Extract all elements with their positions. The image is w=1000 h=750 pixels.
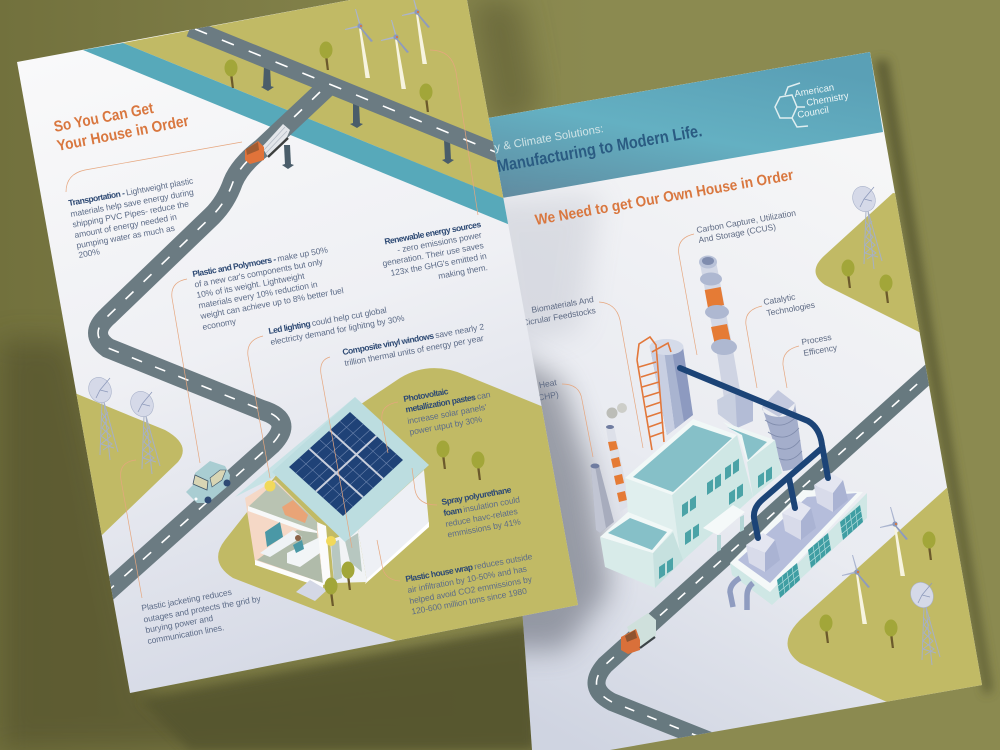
text: transportation: pumping water as much as bbox=[76, 223, 175, 250]
callout: process efficiency: Efficency bbox=[803, 342, 839, 358]
callout: biomaterials: Biomaterials And bbox=[531, 294, 595, 315]
icon: silo bbox=[762, 390, 803, 471]
callout: CCUS bbox=[696, 211, 796, 243]
text: renewable energy sources: 123x the GHG's emitted in bbox=[390, 251, 488, 278]
front bush bbox=[324, 578, 338, 606]
callout: combined heat and power: Combined Heat bbox=[498, 377, 558, 397]
text: plastic house wrap: 120-600 million tons since 1980 bbox=[411, 586, 528, 616]
olive area top right bbox=[816, 193, 920, 332]
callout: CCUS: And Storage (CCUS) bbox=[698, 221, 777, 245]
solar panels bbox=[289, 412, 403, 516]
text: plastic and polymers: weight can achieve up to 8% better fuel bbox=[199, 285, 344, 321]
pillar and porch bbox=[317, 522, 331, 585]
logo: American Chemistry Council: American bbox=[794, 82, 835, 100]
text: plastic and polymers: Plastic and Polymoers - make up 50% bbox=[192, 244, 329, 279]
logo: American Chemistry Council: Chemistry bbox=[806, 91, 850, 109]
icon: small chimneys with smoke bbox=[590, 403, 630, 533]
text: transportation bbox=[68, 175, 195, 260]
wind turbines left page bbox=[345, 0, 430, 89]
icon: blue car bbox=[186, 461, 230, 504]
olive field top bbox=[123, 0, 510, 201]
text: plastic house wrap: helped avoid CO2 emmissions by bbox=[409, 574, 533, 606]
text: renewable energy sources: making them. bbox=[437, 262, 488, 281]
icon: lower factory with rooftop units bbox=[730, 473, 867, 610]
roof plane bbox=[272, 397, 429, 542]
panel: left page, so you can get your house in order bbox=[0, 0, 600, 700]
panel: right page, own house in order bbox=[488, 52, 982, 750]
text: photovoltaic metallization pastes: increase solar panels' bbox=[407, 402, 488, 426]
text: renewable energy sources: Renewable energy sources bbox=[384, 219, 482, 246]
olive field left bbox=[76, 394, 183, 535]
text: plastic house wrap bbox=[405, 551, 533, 616]
text: plastic house wrap: Plastic house wrap reduces outside bbox=[405, 551, 533, 584]
delivery truck bbox=[621, 613, 656, 654]
gable overhang bbox=[235, 397, 355, 497]
text: spray polyurethane foam: Spray polyurethane bbox=[441, 484, 512, 507]
lower box bbox=[600, 537, 655, 588]
text: plastic and polymers: of a new car's components but only bbox=[194, 256, 324, 289]
callout: catalytic technologies bbox=[764, 294, 815, 316]
logo: American Chemistry Council: Council bbox=[797, 105, 830, 121]
text: plastic and polymers: 10% of its weight. Lightweight bbox=[196, 270, 306, 300]
callout: process efficiency bbox=[802, 336, 837, 356]
text: spray polyurethane foam: foam insulation could bbox=[443, 494, 521, 518]
text: renewable energy sources: generation. Their use saves bbox=[382, 240, 484, 268]
callout: CCUS: Carbon Capture, Utilization bbox=[696, 208, 797, 235]
text: spray polyurethane foam: emmissions by 41% bbox=[447, 516, 522, 539]
wind turbines right page bbox=[842, 507, 908, 624]
header band bbox=[449, 52, 883, 198]
text: composite vinyl windows: Composite vinyl windows save nearly 2 bbox=[342, 321, 485, 357]
pipe truck bbox=[245, 124, 290, 164]
text: plastic jacketing bbox=[141, 587, 262, 646]
callout lines left page bbox=[66, 50, 478, 598]
navy process pipes bbox=[680, 368, 828, 538]
icon: big chimney bbox=[699, 256, 753, 428]
text: plastic jacketing: Plastic jacketing reduces bbox=[141, 587, 232, 613]
road bbox=[596, 368, 935, 745]
canopy bbox=[703, 505, 745, 535]
text: plastic jacketing: outages and protects the grid by bbox=[143, 593, 262, 624]
callout: biomaterials bbox=[526, 296, 596, 326]
heading: so you can get your house in order: Your House in Order bbox=[56, 113, 190, 155]
windows bbox=[659, 458, 772, 579]
icon: main factory building bbox=[600, 419, 782, 588]
header title: Manufacturing to Modern Life. bbox=[495, 121, 704, 176]
rooftop cubes bbox=[746, 533, 780, 572]
text: plastic jacketing: communication lines. bbox=[147, 622, 225, 646]
text: spray polyurethane foam: reduce havc-relates bbox=[445, 506, 518, 529]
olive field around house bbox=[218, 368, 600, 645]
trees left page bbox=[224, 42, 484, 480]
text: photovoltaic metallization pastes bbox=[403, 386, 491, 437]
trees right page bbox=[820, 260, 936, 648]
text: transportation: materials help save energy during bbox=[70, 187, 195, 219]
text: photovoltaic metallization pastes: Photovoltaic bbox=[403, 386, 449, 404]
header subtitle: Chemistry & Climate Solutions: bbox=[449, 123, 605, 162]
text: spray polyurethane foam bbox=[441, 484, 522, 539]
steps bbox=[296, 580, 327, 601]
bridge posts bbox=[261, 66, 454, 169]
text: transportation: 200% bbox=[78, 246, 101, 260]
text: plastic and polymers: economy bbox=[202, 316, 238, 332]
text: led lighting: electricty demand for lighitng by 30% bbox=[270, 313, 406, 347]
heading: we need to get our own house in order: We Need to get Our Own House in Order bbox=[534, 167, 795, 229]
callout: catalytic technologies: Catalytic bbox=[763, 291, 797, 307]
callout: combined heat and power bbox=[539, 380, 558, 400]
text: plastic and polymers bbox=[192, 244, 344, 332]
soft window shadow bbox=[480, 195, 610, 650]
antennas right page bbox=[849, 183, 940, 665]
callout: catalytic technologies: Technologies bbox=[766, 300, 816, 318]
vent pipes bbox=[730, 578, 753, 610]
teal river band bbox=[83, 43, 520, 229]
logo: American Chemistry Council bbox=[775, 82, 850, 127]
main block bbox=[672, 435, 753, 562]
front floor slab bbox=[255, 560, 323, 588]
back wing bbox=[747, 440, 782, 497]
icon: house cutaway with solar roof bbox=[235, 397, 429, 606]
right wall bbox=[358, 470, 429, 582]
text: composite vinyl windows: trillion thermal units of energy per year bbox=[344, 333, 485, 368]
olive area bottom right bbox=[788, 488, 982, 702]
interior bbox=[245, 480, 323, 583]
text: renewable energy sources: - zero emissions power bbox=[396, 230, 483, 255]
text: renewable energy sources bbox=[382, 219, 488, 281]
callout: combined heat and power: Power (CHP) bbox=[509, 389, 560, 408]
callout: process efficiency: Process bbox=[801, 332, 832, 347]
road network bbox=[98, 28, 510, 598]
text: transportation: Transportation - Lightweight plastic bbox=[68, 175, 195, 208]
text: plastic house wrap: air infiltration by 10-50% and has bbox=[407, 563, 527, 595]
text: led lighting: Led lighting could help cut global bbox=[268, 305, 387, 336]
heading: so you can get your house in order: So You Can Get bbox=[53, 100, 155, 136]
text: transportation: amount of energy needed in bbox=[74, 212, 178, 240]
icon: column tank with ladder bbox=[637, 337, 693, 450]
text: plastic and polymers: materials every 10% reduction in bbox=[198, 279, 319, 310]
solar wall panels bbox=[777, 505, 863, 598]
text: transportation: shipping PVC Pipes- reduce the bbox=[72, 198, 190, 229]
text: photovoltaic metallization pastes: metallization pastes can bbox=[405, 389, 491, 414]
antennas left page bbox=[85, 374, 160, 474]
porch tree bbox=[342, 562, 354, 590]
text: photovoltaic metallization pastes: power utput by 30% bbox=[409, 414, 483, 437]
text: plastic jacketing: burying power and bbox=[145, 613, 214, 635]
callout: biomaterials: Cicrular Feedstocks bbox=[522, 305, 596, 328]
lamps bbox=[264, 480, 276, 492]
callout lines right page bbox=[562, 234, 799, 457]
